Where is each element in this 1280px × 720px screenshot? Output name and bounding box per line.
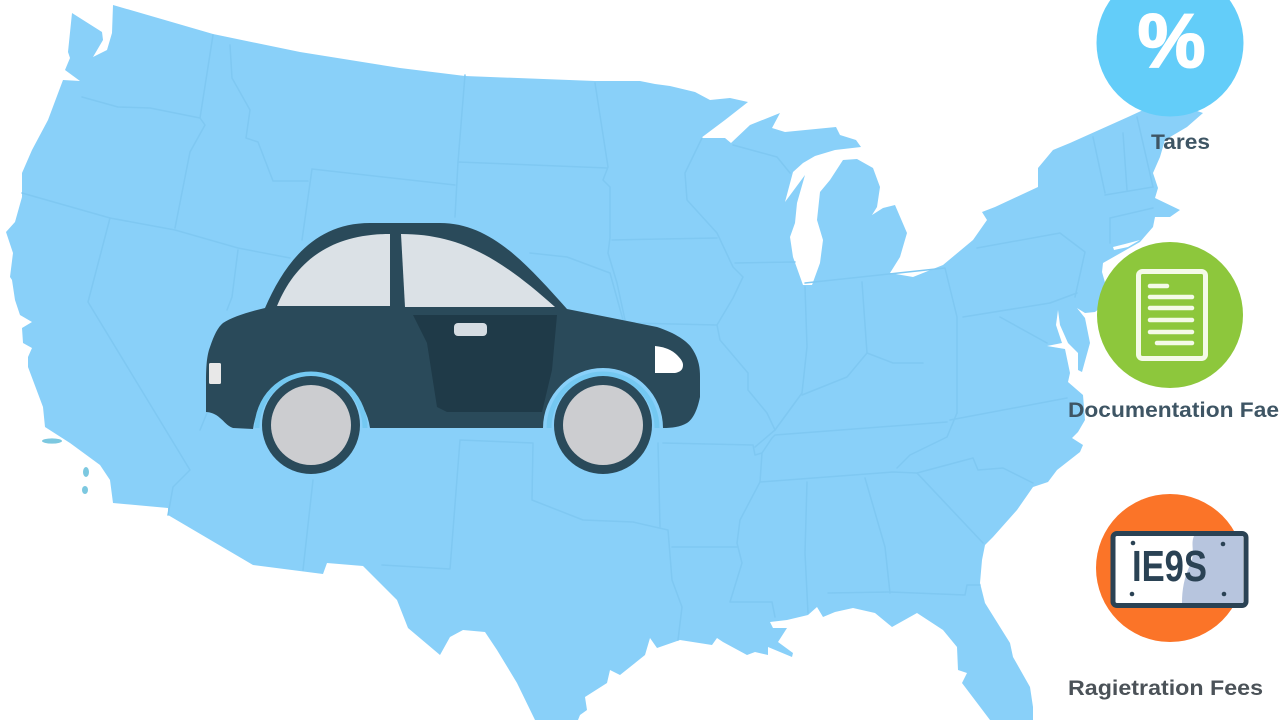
icon: documentation fee badge [1097,242,1243,388]
car: tail light [209,363,221,384]
car: front window [401,234,555,307]
document icon [1138,272,1206,358]
car: door [413,315,557,412]
car: rear window [277,234,390,306]
car: wheel arch highlights [257,374,657,428]
car: rear wheel [262,376,360,474]
car: body [206,223,700,429]
map: Channel Islands [42,438,89,494]
licence plate [1113,534,1246,606]
icon: taxes percent badge [1096,0,1244,116]
icon: taxes percent badge: % [1138,0,1205,84]
plate number: IE9S [1132,542,1207,591]
label: taxes: Tares [1151,131,1210,154]
map: state borders [22,35,1153,640]
label: registration fees: Ragietration Fees [1068,677,1263,700]
car: front wheel [554,376,652,474]
label: documentation fee: Documentation Fae [1068,399,1279,422]
icon: car [206,223,700,474]
car: headlight [655,346,683,373]
car: door handle [454,323,487,336]
icon: registration fees badge [1096,494,1246,642]
